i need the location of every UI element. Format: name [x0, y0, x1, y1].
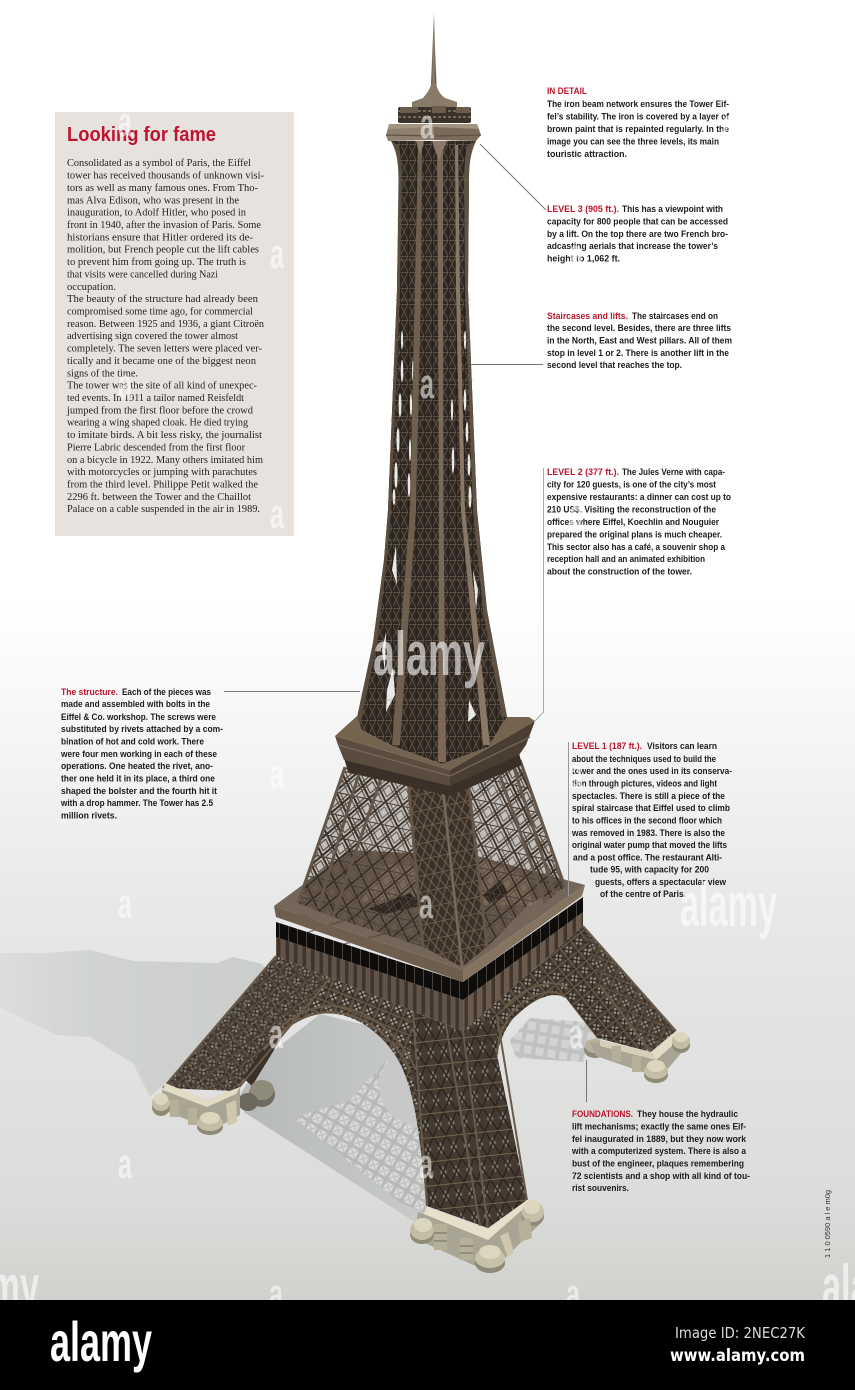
callout: Level 2: city for 120 guests, is one of the city’s most [547, 480, 716, 490]
callout: Level 2 [547, 467, 732, 576]
callout: Level 2: LEVEL 2 (377 ft.). [547, 467, 619, 477]
callout: Level 2: offices where Eiffel, Koechlin and Nouguier [547, 517, 720, 527]
stock watermarks: a [569, 490, 583, 537]
shadow behind right leg [510, 1018, 600, 1062]
callout: Level 2: reception hall and an animated exhibition [547, 554, 705, 564]
stock watermarks: a [419, 880, 433, 927]
dome [412, 84, 457, 108]
spire [431, 12, 436, 84]
callout: Level 1: tower and the ones used in its conserva- [572, 766, 732, 776]
callout: Level 1: guests, offers a spectacular view [595, 877, 726, 887]
callout: In detail [547, 86, 729, 159]
callout: Level 3: This has a viewpoint with [622, 204, 723, 214]
callout: Level 2: about the construction of the tower. [547, 566, 692, 576]
callout: The structure: Each of the pieces was [122, 687, 211, 697]
callout: In detail: The iron beam network ensures the Tower Eif- [547, 99, 729, 109]
panel body text: historians ensure that Hitler ordered its de- [67, 232, 253, 244]
panel body text: Palace on a cable suspended in the air in 1989. [67, 504, 260, 515]
callout: Level 1: spectacles. There is still a piece of the [572, 791, 725, 801]
callout: Level 1: about the techniques used to build the [572, 754, 716, 764]
callout: Level 2: expensive restaurants: a dinner can cost up to [547, 492, 732, 502]
level 1 frieze [276, 912, 583, 1031]
panel body text: occupation. [67, 282, 116, 293]
callout: Level 3: capacity for 800 people that can be accessed [547, 216, 728, 226]
panel body text: advertising sign covered the tower almost [67, 331, 238, 342]
mid front pillar [408, 780, 487, 967]
vertical image code: 1 1 0 0590 a l e m0g [825, 1190, 832, 1258]
stock watermarks: a [569, 230, 583, 277]
footer bar [0, 1300, 855, 1390]
panel body text: compromised some time ago, for commercial [67, 306, 253, 318]
callout: Level 1: was removed in 1983. There is also the [571, 828, 725, 838]
callout: Level 1: to his offices in the second floor which [572, 816, 722, 826]
floor openings [368, 880, 508, 914]
level 1 inner floor [360, 857, 532, 905]
callout: Foundations: with a computerized system. There is also a [571, 1146, 746, 1156]
callout: The structure: made and assembled with bolts in the [61, 699, 210, 709]
callout: Level 1: LEVEL 1 (187 ft.). [572, 741, 642, 751]
upper horizontal bands [368, 180, 501, 700]
panel body text: signs of the time. [67, 368, 138, 380]
stock watermarks: a [569, 750, 583, 797]
callout: Level 1: tion through pictures, videos and light [572, 778, 717, 788]
callout: Staircases and lifts: second level that reaches the top. [547, 360, 682, 370]
panel body text: with motorcycles or jumping with parachutes [67, 467, 257, 478]
callout: Staircases and lifts: The staircases end on [632, 311, 718, 321]
panel body text: on a bicycle in 1922. Many others imitated him [67, 455, 264, 466]
website: www.alamy.com [670, 1346, 805, 1366]
panel body text [66, 158, 265, 515]
foundation: left [152, 1080, 275, 1135]
left leg underside [243, 1032, 285, 1086]
callout: Foundations [571, 1109, 750, 1193]
callout: Foundations: FOUNDATIONS. [572, 1109, 633, 1119]
callout: Staircases and lifts: the second level. Besides, there are three lifts [547, 323, 731, 333]
callout: Level 1: of the centre of Paris. [600, 889, 686, 899]
stock watermarks: a [569, 1010, 583, 1057]
image id: Image ID: 2NEC27K [675, 1324, 806, 1342]
stock watermarks: a [420, 360, 434, 407]
panel body text: The tower was the site of all kind of unexpec- [67, 380, 257, 392]
panel body text: wearing a wing shaped cloak. He died trying [67, 418, 249, 428]
lattice shadow [294, 1060, 426, 1214]
callout: In detail: brown paint that is repainted regularly. In the [547, 124, 729, 134]
callout: Level 2: prepared the original plans is much cheaper. [547, 530, 722, 540]
panel body text: completely. The seven letters were placed ver- [67, 344, 262, 354]
callout: Level 2: This sector also has a café, a souvenir shop a [547, 542, 725, 552]
callout: The structure: The structure. [61, 687, 118, 697]
panel body text: reason. Between 1925 and 1936, a giant Citroën [67, 319, 265, 330]
callout: Foundations: bust of the engineer, plaques remembering [572, 1158, 744, 1168]
callout: In detail: touristic attraction. [547, 149, 627, 159]
Eiffel Tower illustration [152, 12, 690, 1273]
callout: The structure: million rivets. [61, 810, 117, 820]
foundation: front [410, 1200, 544, 1273]
stock watermarks: alamy [680, 871, 777, 940]
panel body text: to imitate birds. A bit less risky, the journalist [67, 430, 262, 441]
panel body text: inauguration, to Adolf Hitler, who posed in [67, 208, 247, 218]
stock watermarks: a [118, 98, 132, 145]
callout: The structure: operations. One heated the rivet, ano- [61, 761, 213, 771]
callout: Foundations: 72 scientists and a shop with all kind of tou- [572, 1171, 750, 1181]
panel body text: from the third level. Philippe Petit walked the [67, 480, 258, 490]
callout: Level 3: adcasting aerials that increase the tower’s [547, 241, 718, 251]
mid right pillar [497, 760, 565, 903]
see-through slits [382, 331, 481, 722]
callout: Level 3 [547, 204, 728, 264]
stock watermarks: a [270, 750, 284, 797]
callout: Level 1 [571, 741, 732, 899]
callout: Level 1: spiral staircase that Eiffel used to climb [572, 803, 731, 813]
panel body text: tically and it became one of the biggest neon [67, 356, 257, 367]
callout: Foundations: They house the hydraulic [637, 1109, 738, 1119]
panel body text: Consolidated as a symbol of Paris, the Eiffel [67, 158, 251, 169]
stock watermarks: a [722, 100, 736, 147]
mid left pillar [298, 767, 383, 917]
right leg dense lattice [583, 926, 676, 1052]
stock watermarks: a [118, 1140, 132, 1187]
right face lattice, mid section [443, 760, 565, 947]
callout: The structure: Eiffel & Co. workshop. The screws were [61, 712, 216, 722]
level 2 underside [344, 753, 522, 796]
panel: Looking for fame [55, 112, 294, 536]
stock watermarks: a [118, 360, 132, 407]
panel body text: to prevent him from going up. The truth is [67, 257, 246, 268]
callout: Level 1: original water pump that moved the lifts [572, 840, 727, 850]
callout: Staircases and lifts [547, 311, 732, 370]
level 1 top surface [274, 850, 585, 970]
stock watermarks: a [269, 1270, 283, 1317]
stock watermarks: a [269, 1010, 283, 1057]
upper tower lattice [355, 141, 507, 764]
callout: In detail: IN DETAIL [547, 86, 588, 96]
panel body text: tors as well as many famous ones. From Tho- [67, 183, 258, 194]
callout: The structure: substituted by rivets attached by a com- [61, 724, 223, 734]
level 1 black band [276, 897, 583, 1000]
callout: Level 1: and a post office. The restaurant Alti- [573, 852, 722, 862]
top deck [398, 106, 471, 123]
callout: Foundations: lift mechanisms; exactly the same ones Eif- [572, 1122, 746, 1132]
callout: In detail: image you can see the three levels, its main [547, 136, 719, 146]
callout: In detail: fel’s stability. The iron is covered by a layer of [547, 112, 729, 122]
callout: Level 3: LEVEL 3 (905 ft.). [547, 204, 619, 214]
panel body text: jumped from the first floor before the crowd [66, 406, 254, 416]
panel body text: molition, but French people cut the lift cables [67, 244, 259, 256]
stock watermarks: a [566, 1270, 580, 1317]
callout: The structure: shaped the bolster and the fourth hit it [61, 786, 217, 796]
shadow inner arc [379, 1060, 420, 1130]
mid front edge highlight [443, 790, 462, 967]
legs lattice: left and front-left face [163, 956, 488, 1228]
callout: The structure: ther one held it in its place, a third one [61, 774, 215, 784]
callout: The structure [60, 687, 223, 820]
legs lattice: right and front-right face [463, 926, 676, 1228]
left face lattice, mid section [298, 767, 443, 947]
leader lines [224, 144, 586, 1102]
callout: Level 3: height to 1,062 ft. [547, 254, 620, 264]
callout: Level 1: tude 95, with capacity for 200 [590, 864, 709, 874]
panel body text: mas Alva Edison, who was present in the [67, 196, 239, 206]
panel body text: ted events. In 1911 a tailor named Reisfeldt [67, 393, 244, 404]
top platform slab [386, 124, 481, 141]
stock watermarks: a [420, 100, 434, 147]
callout: Level 2: 210 US$. Visiting the reconstruction of the [547, 504, 716, 514]
alamy logo: alamy [50, 1310, 152, 1373]
column flares under top platform [416, 141, 447, 160]
callout: Foundations: fel inaugurated in 1889, but they now work [572, 1134, 746, 1144]
panel body text: that visits were cancelled during Nazi [67, 270, 218, 280]
stock watermarks: alamy [373, 620, 485, 689]
callout: The structure: with a drop hammer. The Tower has 2.5 [60, 798, 213, 808]
callout: Foundations: rist souvenirs. [572, 1183, 629, 1193]
front leg dense lattice [410, 1012, 527, 1228]
right face lattice lines [443, 760, 565, 947]
callout: Level 1: Visitors can learn [647, 741, 717, 751]
stock watermarks: a [419, 1140, 433, 1187]
callout: The structure: were four men working in each of these [60, 749, 217, 759]
left leg dense lattice [163, 956, 330, 1091]
stock watermarks: a [118, 880, 132, 927]
panel body text: front in 1940, after the invasion of Paris. Some [67, 220, 261, 231]
tower shadow on ground, left [0, 950, 270, 1097]
tower shadow under arch [240, 1014, 430, 1232]
callout: Level 3: by a lift. On the top there are two French bro- [547, 229, 728, 239]
upper tower pillars [355, 141, 507, 762]
panel heading: Looking for fame [67, 124, 216, 146]
panel body text: The beauty of the structure had already been [67, 294, 259, 305]
left face lattice lines [298, 767, 443, 947]
foundation: right [584, 1031, 690, 1083]
callout: Level 2: The Jules Verne with capa- [622, 467, 725, 477]
callout: Staircases and lifts: Staircases and lifts. [547, 311, 628, 321]
callout: Staircases and lifts: stop in level 1 or 2. There is another lift in the [547, 348, 729, 358]
panel body text: Pierre Labric descended from the first floor [67, 442, 245, 454]
floor lattice shadow [300, 905, 440, 960]
panel body text: tower has received thousands of unknown visi- [67, 170, 264, 182]
level 1 slab edge [274, 885, 585, 982]
stock watermarks: a [270, 490, 284, 537]
leg structural edges [163, 926, 676, 1228]
mid pillar edge lines [298, 760, 565, 967]
callout: Staircases and lifts: in the North, East and West pillars. All of them [547, 336, 732, 346]
stock watermarks: a [270, 230, 284, 277]
panel body text: 2296 ft. between the Tower and the Chaillot [67, 492, 251, 503]
level 2 platform [335, 716, 535, 786]
callout: The structure: bination of hot and cold work. There [61, 736, 204, 746]
